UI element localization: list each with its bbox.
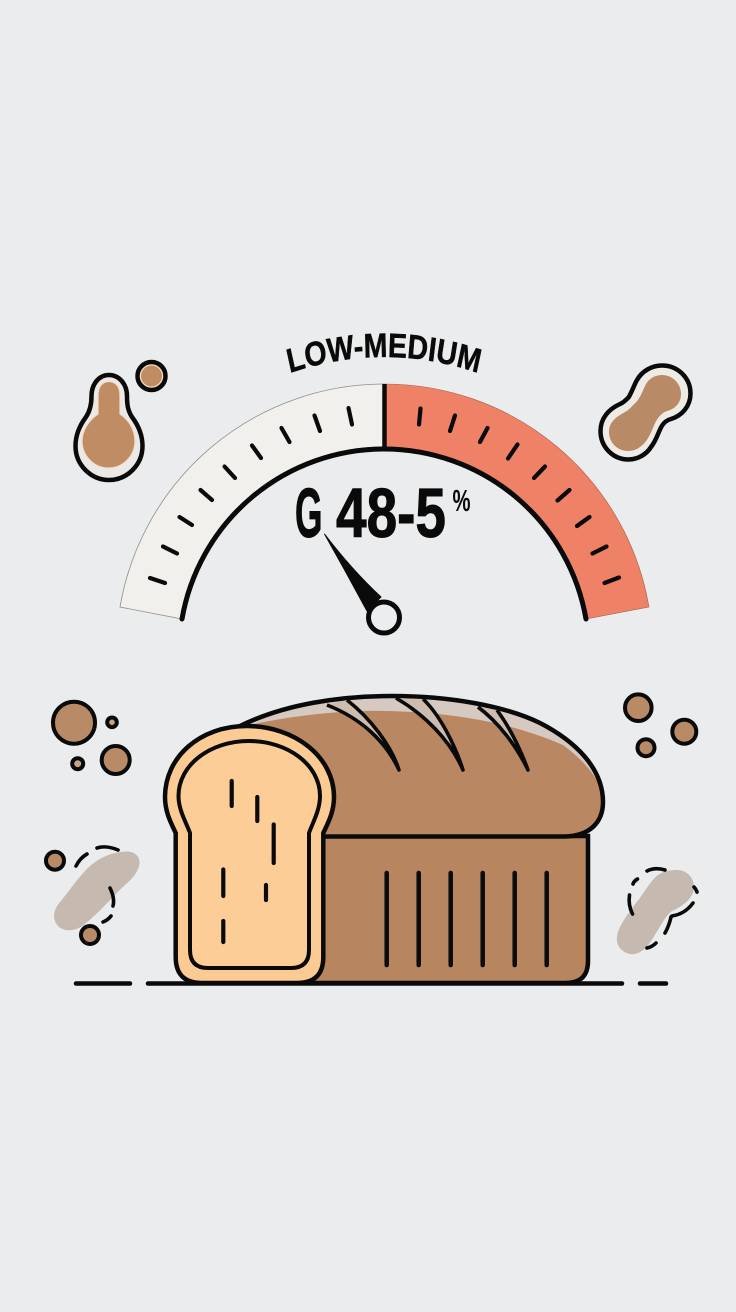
slice crumb marks	[223, 781, 274, 942]
gauge segment: low	[120, 384, 384, 619]
gauge divider	[382, 384, 387, 447]
loaf side ribs	[387, 873, 547, 965]
gauge value: 48-5	[336, 474, 446, 552]
loaf body	[300, 836, 588, 983]
gauge inner arc	[182, 449, 586, 619]
heading: low-medium: LOW-MEDIUM	[286, 333, 482, 373]
loaf crust outline	[240, 696, 603, 836]
percent sign: %	[452, 483, 470, 518]
gauge value	[295, 474, 446, 552]
icon: keyhole seed	[76, 375, 142, 480]
smudge dashes: left	[76, 847, 118, 922]
crumbs: left	[46, 702, 130, 944]
smudge dashes: right	[629, 869, 697, 948]
icon: peanut	[600, 366, 690, 460]
loaf score marks	[327, 698, 528, 770]
smudge: right	[617, 869, 697, 954]
crumbs: right	[625, 694, 696, 756]
gauge needle	[324, 534, 400, 633]
loaf crust top	[240, 696, 603, 836]
bread slice	[165, 726, 334, 983]
loaf crust shade	[250, 711, 603, 836]
bread loaf	[165, 696, 603, 983]
gauge segment: high	[384, 384, 649, 619]
icon: small seed	[138, 362, 166, 390]
gauge	[120, 384, 649, 633]
gauge ticks	[150, 408, 619, 583]
gauge value: G	[295, 474, 322, 552]
smudge: left	[54, 847, 140, 930]
ground line	[76, 981, 666, 986]
